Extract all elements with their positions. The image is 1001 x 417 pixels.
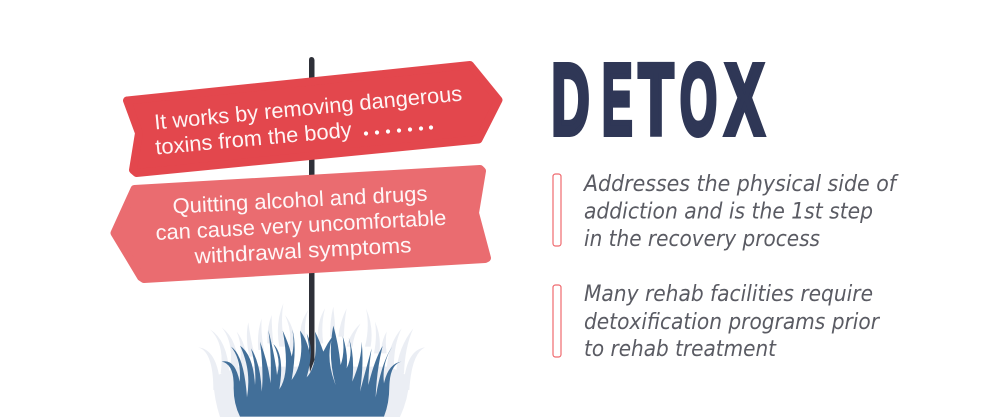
text: second point xyxy=(584,282,881,362)
title: D xyxy=(552,44,590,156)
illustration: sign post xyxy=(309,57,314,372)
text: first point xyxy=(582,172,899,252)
title xyxy=(552,44,764,156)
sign text: removing toxins xyxy=(153,82,463,159)
title: O xyxy=(680,44,717,156)
title: E xyxy=(602,44,632,156)
sign text: withdrawal: Quitting alcohol and drugs xyxy=(172,182,428,218)
sign: top red arrow xyxy=(127,65,498,173)
text: first point: addiction and is the 1st step xyxy=(584,200,873,224)
marker: second point xyxy=(553,285,561,357)
text: second point: detoxification programs prior xyxy=(584,310,881,335)
sign text: withdrawal: withdrawal symptoms xyxy=(193,233,412,269)
title: T xyxy=(638,44,674,156)
text: second point: Many rehab facilities require xyxy=(584,282,873,307)
sign: lower coral arrow xyxy=(114,169,487,279)
title: X xyxy=(725,44,764,156)
sign text: withdrawal: can cause very uncomfortable xyxy=(155,206,447,245)
sign text: removing toxins: toxins from the body xyxy=(154,118,353,159)
marker: first point xyxy=(553,174,561,246)
text: first point: Addresses the physical side of xyxy=(582,172,899,197)
dotted trail xyxy=(364,125,433,136)
text: second point: to rehab treatment xyxy=(584,337,777,362)
sign text: withdrawal xyxy=(155,182,447,269)
text: first point: in the recovery process xyxy=(584,227,820,252)
illustration: blue grass xyxy=(222,326,402,417)
sign text: removing toxins: It works by removing dangerous xyxy=(153,82,463,134)
illustration: grass background xyxy=(198,303,425,417)
